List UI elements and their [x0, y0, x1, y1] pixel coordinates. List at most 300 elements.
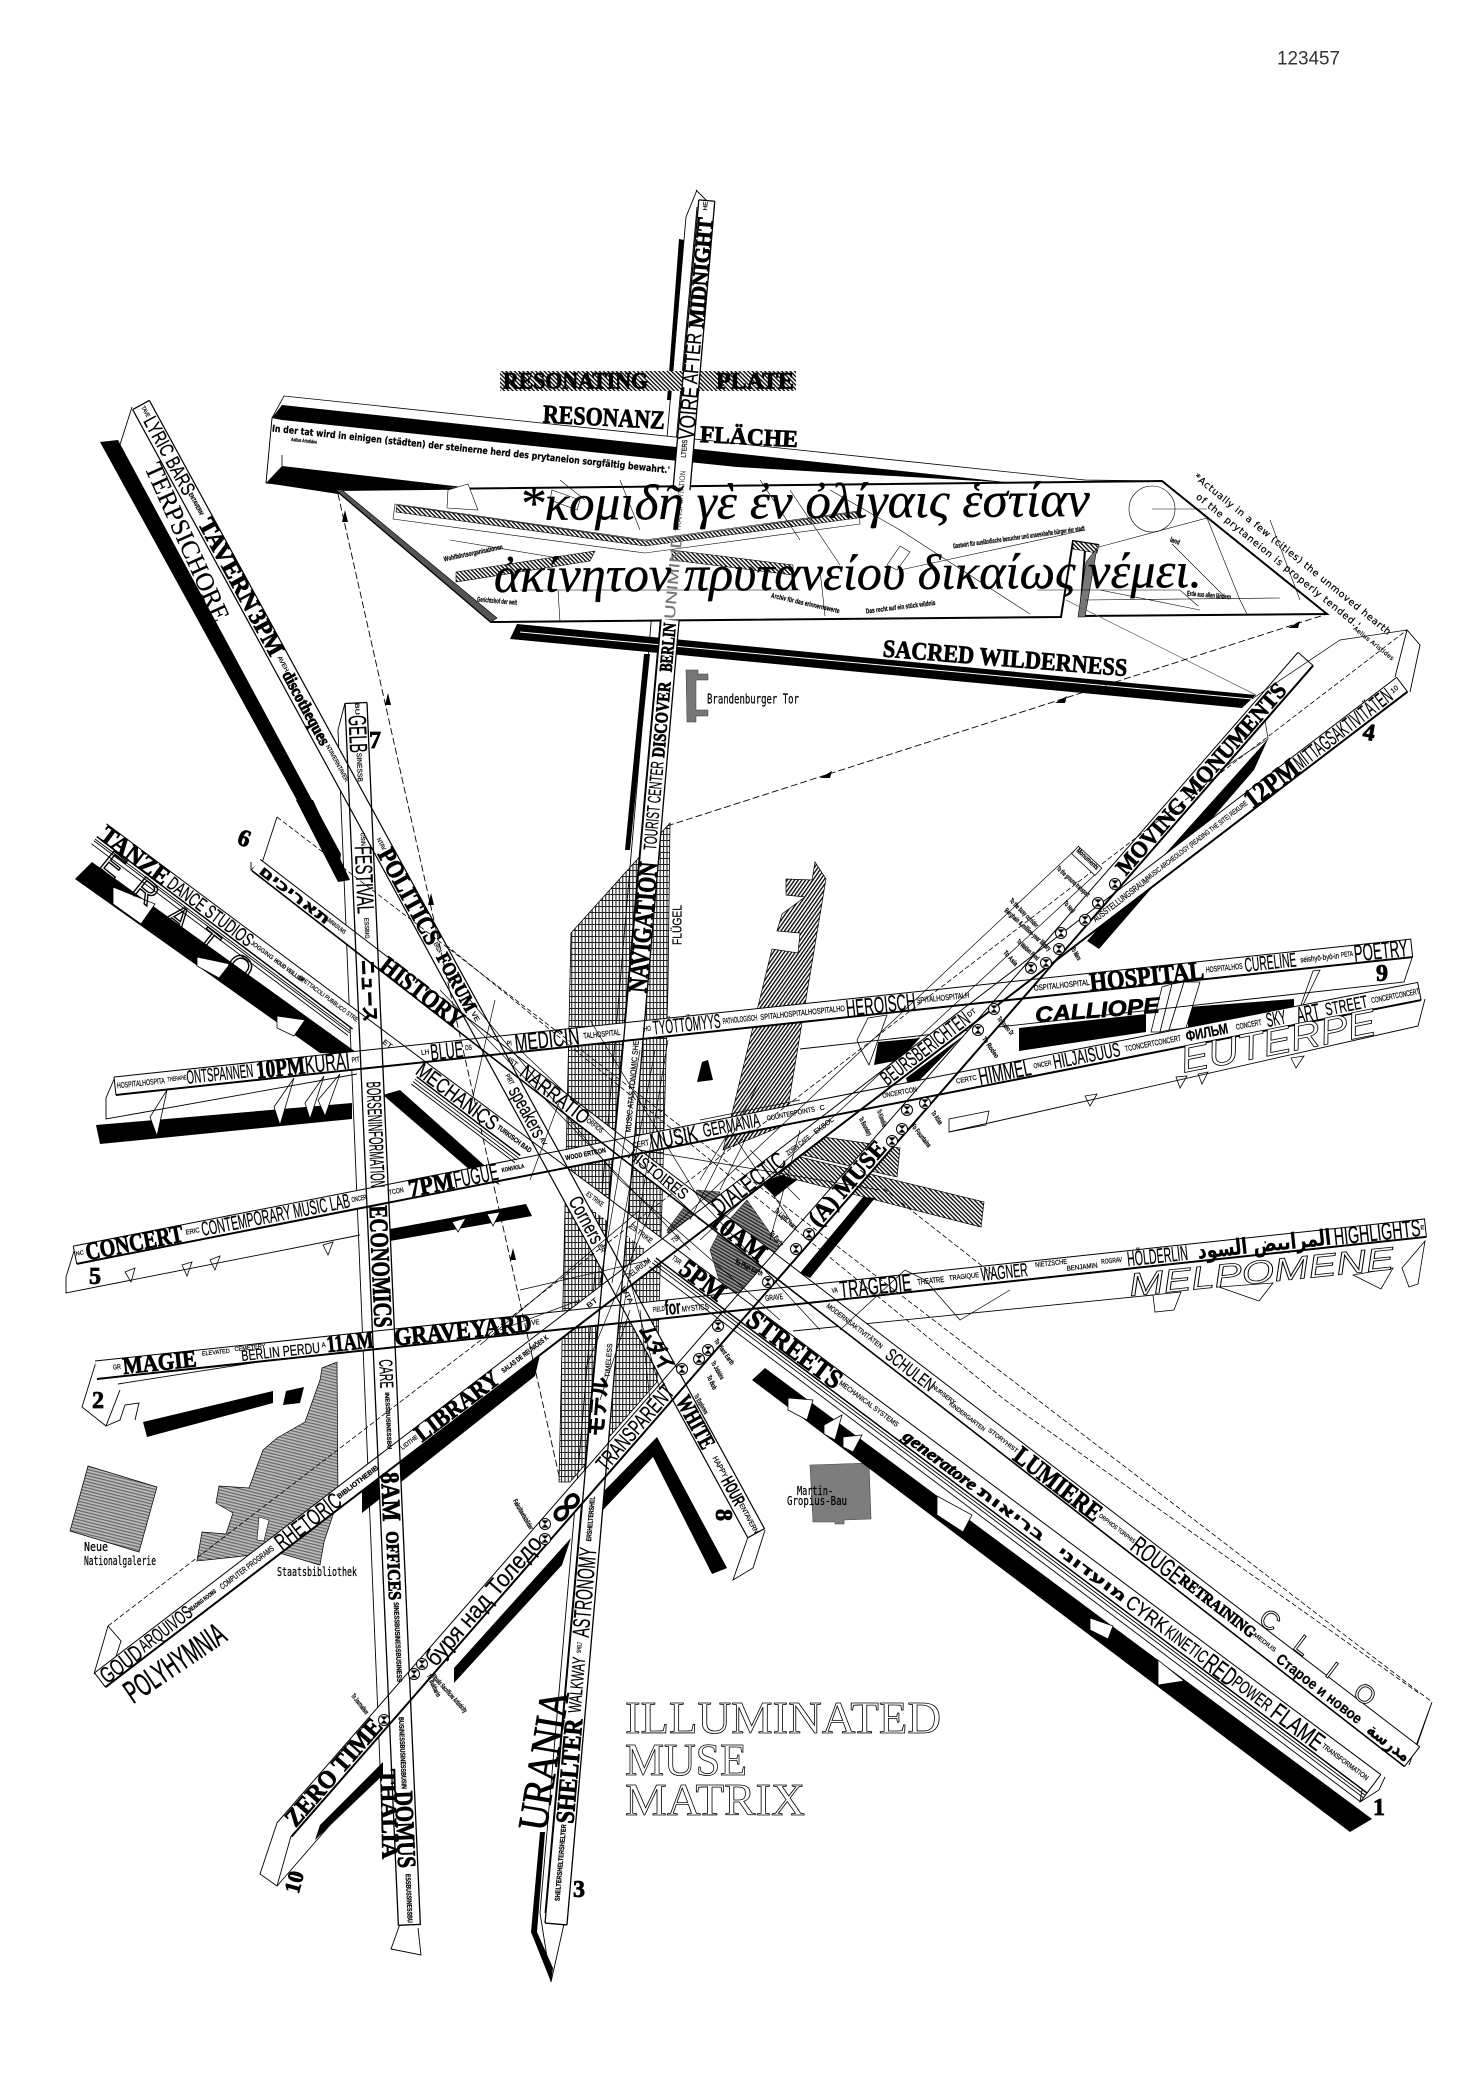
beam 2: Magie to Highlights: GRAVEYARD: [393, 1310, 533, 1352]
beam 2: Magie to Highlights: GRAVE: [765, 1292, 784, 1303]
beam 8: Lyric Bars to Happy Hour: discotheques: [278, 667, 334, 749]
beam numbers 1 to 10: 8: [710, 1509, 736, 1521]
small destination labels beside the stations: To Asia: [1001, 950, 1019, 968]
small destination labels beside the stations: To Bob: [705, 1375, 718, 1391]
beam 8: Lyric Bars to Happy Hour: speakers: [504, 1083, 549, 1142]
small destination labels beside the stations: Monuments: [1075, 847, 1100, 872]
beam numbers 1 to 10: 9: [1376, 961, 1388, 987]
small destination labels beside the stations: To Mars: [1069, 946, 1082, 962]
building: Martin-Gropius-Bau: Gropius-Bau: [787, 1494, 847, 1508]
beam 2: Magie to Highlights: WAGNER: [980, 1260, 1029, 1286]
muse name: Terpsichore: TERPSICHORE: [139, 458, 235, 626]
beam 6: Histories to Clio: [247, 854, 1421, 1769]
beam 2: Magie to Highlights: VE: [531, 1319, 540, 1327]
beam 10: Zero Time to Moving Monuments: MOVING MONUMENTS: [1111, 678, 1291, 880]
beam 5: Concert to Concert: HIMMEL: [976, 1054, 1033, 1091]
beam 2: Magie to Highlights: NIETZSCHE: [1035, 1259, 1068, 1269]
plate: small captions: [443, 525, 1231, 615]
quote: English translation along plate edge: *Actually in a few (cities) the unmoved hearth: [1192, 472, 1393, 638]
beam 5: Concert to Concert: 7PM: [406, 1167, 456, 1203]
muse name: Clio: I: [1320, 1656, 1344, 1684]
beam 6: Histories to Clio: SCHULEN: [882, 1345, 939, 1395]
beam 5: Concert to Concert: CONTEMPORARY MUSIC LAB: [199, 1190, 352, 1241]
beam 6: Histories to Clio: HISTOIRES: [624, 1147, 691, 1203]
muse name: Melpomene: MELPOMENE: [1127, 1240, 1396, 1303]
beam 2: Magie to Highlights: A: [321, 1342, 326, 1349]
beam 4: Polyhymnia to Mittagsaktivitäten: LIDTHE: [400, 1435, 420, 1452]
small destination labels beside the stations: To Fountains: [909, 1123, 932, 1149]
beam 2: Magie to Highlights: ELEVATED: [202, 1349, 231, 1358]
dashed construction lines of the long beams: [108, 630, 1432, 1702]
beam 5: Concert to Concert: ONCER: [351, 1194, 367, 1204]
beam 9: Hospital to Poetry: HO: [644, 1025, 652, 1033]
panel: Greek inscription plate: [336, 480, 1327, 622]
beam 6: Histories to Clio: ORPHIOS TORPHIS: [1097, 1513, 1136, 1545]
resonating plate: hearth box beam: In der tat wird in einigen (städten) der steinerne herd des prytaneion sorgfältig bewahrt.': [271, 424, 670, 476]
beam 7: Gelb to Domus: GELB: [343, 714, 372, 754]
beam 1: Tanze to Streets and Transformation: HOUD VEILLIER: [272, 958, 305, 985]
beam 6: Histories to Clio: HISTORY: [374, 952, 469, 1034]
beam 10: Zero Time to Moving Monuments: (A) MUSE: [803, 1136, 892, 1232]
beam 10: Zero Time to Moving Monuments: буря над Толедо: [420, 1530, 548, 1672]
small destination labels beside the stations: To Explorers: [692, 1393, 709, 1416]
beam 5: Concert to Concert: C: [819, 1104, 825, 1112]
beam 6: Histories to Clio: MEDIUS: [1252, 1632, 1277, 1654]
beam 6: Histories to Clio: LUMIERE: [1008, 1441, 1108, 1527]
beam 5: Concert to Concert: [72, 978, 1422, 1268]
beam 2: Magie to Highlights: BENJAMIN: [1066, 1262, 1098, 1273]
small destination labels beside the stations: To Early: [767, 1230, 784, 1248]
beam 3: Shelter to Voire after Midnight: MUSIC ATAS TONOMIC SHE: [624, 1040, 641, 1133]
beam 2: Magie to Highlights: المرابيض السود: [1196, 1226, 1332, 1265]
beam 2: Magie to Highlights: TRAGIQUE: [949, 1272, 980, 1282]
beam 4: Polyhymnia to Mittagsaktivitäten: 10: [1390, 685, 1400, 695]
beam 10: Zero Time to Moving Monuments: ∞: [537, 1478, 595, 1536]
beam 7: Gelb to Domus: FESTIVAL: [349, 845, 379, 914]
icons: metro station circles along the beams: [378, 878, 1120, 1726]
beam 4: Polyhymnia to Mittagsaktivitäten: RHETORIC: [269, 1487, 346, 1555]
beam 9: Hospital to Poetry: KURAI: [304, 1048, 351, 1079]
beam 4: Polyhymnia to Mittagsaktivitäten: READING ROOMS: [188, 1589, 218, 1614]
small destination labels beside the stations: Berghain & million-year library: [1003, 907, 1052, 953]
quote: English translation along plate edge: of the prytaneion is properly tended.': [1194, 492, 1362, 631]
beam 3: Shelter to Voire after Midnight: SHELTERSHELTERSHELTER: [555, 1824, 568, 1901]
beam 6: Histories to Clio: مدرسة: [1362, 1719, 1415, 1766]
plate: small captions: Gerichtshof der welt: [477, 597, 518, 607]
beam 1: Tanze to Streets and Transformation: MECHANICS: [411, 1059, 503, 1135]
beam 6: Histories to Clio: Старое и новое: [1273, 1651, 1365, 1728]
beam 1: Tanze to Streets and Transformation: TSR: [670, 1255, 682, 1266]
beam 5: Concert to Concert: CONCERT: [83, 1221, 186, 1266]
beam 4: Polyhymnia to Mittagsaktivitäten: COMPUTER PROGRAMS: [218, 1544, 276, 1591]
beam numbers 1 to 10: [89, 719, 1388, 1903]
beam 9: Hospital to Poetry: OS: [465, 1045, 473, 1052]
beam 5: Concert to Concert: NC: [75, 1250, 85, 1258]
beam 3: Shelter to Voire after Midnight: ERSHELTERSHEL: [586, 1496, 597, 1542]
beam 4: Polyhymnia to Mittagsaktivitäten: EKBOL: [813, 1117, 835, 1136]
building: Martin-Gropius-Bau: [787, 1463, 871, 1524]
muse name: Clio: C: [1253, 1602, 1287, 1638]
building: Neue Nationalgalerie: [70, 1466, 157, 1568]
beam 2: Magie to Highlights: [95, 1215, 1427, 1383]
beam 9: Hospital to Poetry: TYÖTTÖMYYS: [652, 1011, 722, 1040]
heading: resonanz fläche: FLÄCHE: [699, 422, 799, 453]
beam 2: Magie to Highlights: for: [664, 1297, 682, 1320]
beam 9: Hospital to Poetry: THERAPIE: [167, 1075, 187, 1083]
building: Staatsbibliothek: [197, 1362, 358, 1579]
beam 10: Zero Time to Moving Monuments: TRANSPARENT: [591, 1379, 679, 1476]
beam 3: Shelter to Voire after Midnight: NAVIGATION: [623, 861, 663, 994]
beam 2: Magie to Highlights: CEMETERY: [234, 1344, 266, 1353]
beam 4: Polyhymnia to Mittagsaktivitäten: MUSIC ARCHEOLOGY (READING THE SITE) REKURE: [1146, 800, 1249, 882]
beam 1: Tanze to Streets and Transformation: TRANSFORMATION: [1320, 1743, 1369, 1782]
muse name: Clio: O: [1348, 1676, 1382, 1712]
muse name: Clio: L: [1288, 1629, 1318, 1661]
beam 1: Tanze to Streets and Transformation: TANZE: [95, 821, 175, 891]
beam 9: Hospital to Poetry: POETRY: [1353, 935, 1409, 968]
beam 7: Gelb to Domus: BU: [353, 703, 360, 715]
beam 1: Tanze to Streets and Transformation: CYRK: [1121, 1592, 1172, 1638]
beam 1: Tanze to Streets and Transformation: RED: [1198, 1648, 1243, 1692]
arrow: dashed line from plate corner to grid block: [338, 494, 560, 1480]
beam 9: Hospital to Poetry: LH: [421, 1049, 430, 1057]
building: hatched stepped block: [723, 862, 826, 1150]
beam 3: Shelter to Voire after Midnight: VOIRE: [673, 386, 703, 441]
beam 1: Tanze to Streets and Transformation: בריאות: [974, 1483, 1049, 1545]
resonating plate: hearth box beam: Aelius Aristides: [291, 437, 317, 446]
beam 6: Histories to Clio: IST: [506, 1057, 519, 1069]
beam 5: Concert to Concert: ONCERTCON: [882, 1086, 918, 1100]
beam 4: Polyhymnia to Mittagsaktivitäten: BT: [586, 1296, 600, 1310]
beam 1: Tanze to Streets and Transformation: ES TRIKE: [584, 1191, 605, 1209]
beam 9: Hospital to Poetry: TALHOSPITAL: [583, 1028, 621, 1041]
beam 5: Concert to Concert: CERT: [632, 1138, 650, 1150]
plate: small captions: Das recht auf ein stück wildnis: [866, 600, 936, 615]
beam 3: Shelter to Voire after Midnight: [542, 199, 721, 1925]
beam 5: Concert to Concert: MUSIK: [648, 1120, 700, 1155]
Greek inscription line 2: ἀκίνητον πρυτανείου δικαίως νέμει.: [494, 542, 1202, 603]
beam 1: Tanze to Streets and Transformation: MECHANICAL SYSTEMS: [838, 1380, 900, 1429]
beam numbers 1 to 10: 10: [279, 1868, 309, 1896]
beam 3: Shelter to Voire after Midnight: LTERS: [681, 439, 689, 458]
arrow: dashed line from grid block to plate tip: [667, 614, 1327, 826]
beam 5: Concert to Concert: COUNTERPOINTS: [766, 1106, 816, 1123]
small destination labels beside the stations: To Rodeo: [980, 1036, 1000, 1060]
beam 1: Tanze to Streets and Transformation: ET: [381, 1039, 394, 1051]
white beam faces (strips mask the buildings): [73, 200, 1426, 1925]
building: Brandenburger Tor: Brandenburger Tor: [707, 692, 799, 708]
plate: small captions: Erde aus allen ländern: [1187, 591, 1231, 601]
beam 8: Lyric Bars to Happy Hour: AV: [538, 1136, 548, 1147]
beam 5: Concert to Concert: ФИЛЬМ: [1184, 1020, 1230, 1045]
beam 3: Shelter to Voire after Midnight: BERLIN: [656, 622, 680, 673]
beam 8: Lyric Bars to Happy Hour: WTA: [619, 1286, 634, 1305]
beam 3: Shelter to Voire after Midnight: UNIMIND: [662, 533, 686, 620]
title: Illuminated Muse Matrix: MUSE: [625, 1734, 747, 1785]
beam 7: Gelb to Domus: USIN: [359, 833, 365, 846]
plate: hatched avenues: [393, 484, 1099, 617]
beam 9: Hospital to Poetry: PETA: [1341, 951, 1354, 959]
beam 3: Shelter to Voire after Midnight: MIDNIGHT: [683, 216, 718, 329]
sacred wilderness black band: [510, 624, 1256, 708]
beam 8: Lyric Bars to Happy Hour: ENTAVERN: [737, 1503, 759, 1535]
beam 9: Hospital to Poetry: PATHOLOGISCH: [722, 1013, 758, 1026]
small destination labels beside the stations: To Walden Pond: [1015, 938, 1040, 962]
beam 6: Histories to Clio: ROUGE: [1125, 1531, 1189, 1590]
beam 8: Lyric Bars to Happy Hour: POLITICS: [372, 844, 446, 950]
beam numbers 1 to 10: 5: [89, 1264, 101, 1290]
beam 5: Concert to Concert: HILJAISUUS: [1051, 1039, 1122, 1074]
label: Flügel: FLÜGEL: [670, 905, 684, 945]
muse name: Euterpe: EUTERPE: [1177, 1002, 1380, 1082]
beam 1: Tanze to Streets and Transformation: ES TRIKE: [628, 1223, 654, 1245]
beam 9: Hospital to Poetry: SPITALHOSPITALHOSPITALHO: [760, 1004, 845, 1022]
small destination labels beside the stations: To Journalism: [349, 1693, 370, 1716]
beam 9: Hospital to Poetry: SPITALHOSPITALH: [916, 991, 970, 1005]
small destination labels beside the stations: To Klondike: [875, 1109, 887, 1128]
pilasters over the shadows: [113, 887, 1425, 1685]
beam 7: Gelb to Domus: INESSBUSINESSBU: [383, 1392, 392, 1449]
beam 5: Concert to Concert: TCON: [388, 1187, 404, 1197]
beam 5: Concert to Concert: KONVIOLA: [501, 1164, 525, 1174]
beam 4: Polyhymnia to Mittagsaktivitäten: LIBRARY: [410, 1366, 505, 1447]
beam 7: Gelb to Domus: SINESSBUSINESSBUSINESS: [392, 1602, 402, 1682]
beam 2: Magie to Highlights: MAGIE: [121, 1346, 198, 1380]
muse name: Erato: ERATO: [94, 844, 261, 989]
beam 8: Lyric Bars to Happy Hour: [129, 399, 768, 1540]
small destination labels beside the stations: To Jobkins: [709, 1360, 725, 1381]
beam 3: Shelter to Voire after Midnight: SHELTER: [550, 1717, 588, 1825]
beam 4: Polyhymnia to Mittagsaktivitäten: SALAS DE REUNIÕES K: [499, 1333, 550, 1375]
beam 9: Hospital to Poetry: [113, 934, 1413, 1100]
beam 1: Tanze to Streets and Transformation: TURKISCH BAD: [495, 1124, 533, 1155]
plate: small captions: Archiv für das erinnernswerte: [770, 593, 840, 615]
beam 3: Shelter to Voire after Midnight: SHELT: [577, 1642, 584, 1653]
beam 2: Magie to Highlights: 11AM: [325, 1327, 375, 1358]
heading: resonating plate: [500, 368, 796, 394]
beam 5: Concert to Concert: FUGUE: [451, 1159, 501, 1194]
beam 4: Polyhymnia to Mittagsaktivitäten: DT: [966, 1007, 978, 1019]
beam 9: Hospital to Poetry: OSPITALHOSPITAL: [1033, 978, 1090, 993]
beam 8: Lyric Bars to Happy Hour: ERIZA: [432, 942, 442, 954]
small destination labels beside the stations: Fakultaetsbilder: [511, 1498, 534, 1531]
thin connecting lines through the centre: [440, 600, 1407, 1400]
muse name: Thalia: THALIA: [376, 1769, 403, 1859]
beam 9: Hospital to Poetry: ONTSPANNEN: [185, 1061, 254, 1089]
plate: small captions: land: [1169, 537, 1181, 547]
beam 7: Gelb to Domus: ESSBUSSINESSBU: [404, 1874, 413, 1923]
small destination labels beside the stations: To the busy corridor: [1008, 898, 1039, 929]
beam 4: Polyhymnia to Mittagsaktivitäten: AUSSTELLUNGSRAUM: [1091, 875, 1151, 924]
beam 8: Lyric Bars to Happy Hour: ムダイ: [634, 1321, 678, 1375]
beam numbers 1 to 10: 6: [234, 825, 254, 853]
building: Neue Nationalgalerie: Nationalgalerie: [84, 1554, 156, 1568]
building: Brandenburger Tor: [686, 670, 799, 722]
beam 7: Gelb to Domus: ECONOMICS: [363, 1205, 398, 1328]
beam 6: Histories to Clio: STORYHIST: [986, 1428, 1019, 1455]
beam 5: Concert to Concert: ERIC: [185, 1227, 200, 1237]
beam 10: Zero Time to Moving Monuments: ZERO TIME: [280, 1713, 388, 1832]
building: Neue Nationalgalerie: Neue: [84, 1540, 108, 1554]
title: Illuminated Muse Matrix: ILLUMINATED: [625, 1692, 941, 1743]
beam 9: Hospital to Poetry: HOSPITALHOSPITA: [117, 1076, 166, 1090]
small destination labels beside the stations: [349, 846, 1102, 1716]
building: Flügel grid block: [559, 823, 670, 1482]
beam 7: Gelb to Domus: [342, 702, 424, 1925]
beam 8: Lyric Bars to Happy Hour: HOUR: [717, 1473, 749, 1509]
beam 6: Histories to Clio: NURSERY: [930, 1384, 956, 1406]
beam numbers 1 to 10: 1: [1373, 1795, 1385, 1821]
muse name: Clio: [1253, 1602, 1382, 1712]
beam 6: Histories to Clio: MODERNSAKTIVITÄTEN: [825, 1302, 884, 1350]
small destination labels beside the stations: To the ground transport: [1055, 865, 1091, 899]
beam 8: Lyric Bars to Happy Hour: ER: [596, 1244, 606, 1254]
small destination labels beside the stations: To Rodeo Dr: [995, 1016, 1015, 1037]
beam 8: Lyric Bars to Happy Hour: TAVERN: [192, 514, 264, 616]
beam 6: Histories to Clio: תאריכים: [255, 862, 334, 928]
beam 8: Lyric Bars to Happy Hour: WHITE: [671, 1391, 720, 1453]
beam 6: Histories to Clio: KINDERGARTEN: [947, 1401, 986, 1433]
beam 9: Hospital to Poetry: MEDICIN: [513, 1023, 581, 1057]
beam 2: Magie to Highlights: TRAGEDIE: [838, 1269, 913, 1304]
beam 3: Shelter to Voire after Midnight: TOURIST CENTER: [640, 761, 668, 851]
beam 8: Lyric Bars to Happy Hour: PIRT: [503, 1073, 515, 1087]
beam 2: Magie to Highlights: BERLIN PERDU: [240, 1340, 321, 1365]
beam 9: Hospital to Poetry: HOSPITAL: [1088, 956, 1205, 997]
beam 1: Tanze to Streets and Transformation: STREETS: [741, 1304, 849, 1395]
beam 2: Magie to Highlights: GR: [113, 1364, 121, 1372]
Greek inscription line 1: *κομιδῆ γὲ ἐν ὀλίγαις ἑστίαν: [519, 471, 1091, 531]
beam 5: Concert to Concert: STREET: [1323, 992, 1369, 1020]
beam 6: Histories to Clio: RETRAINING: [1175, 1572, 1259, 1642]
beam 9: Hospital to Poetry: HOSPITALHOS: [1205, 962, 1243, 974]
plate: small captions: Wohlfahrtsorganisationen: [443, 544, 503, 563]
beam 8: Lyric Bars to Happy Hour: Corners: [564, 1193, 607, 1248]
beam 3: Shelter to Voire after Midnight: モテル: [586, 1376, 613, 1438]
beam 7: Gelb to Domus: ESSBIG: [362, 918, 369, 939]
heading: resonating plate: PLATE: [716, 368, 794, 394]
beam 4: Polyhymnia to Mittagsaktivitäten: TSR: [671, 1234, 682, 1245]
building: Staatsbibliothek: Staatsbibliothek: [277, 1565, 358, 1579]
small destination labels beside the stations: To Atlas: [929, 1110, 944, 1126]
beam 4: Polyhymnia to Mittagsaktivitäten: BEURSBERICHTEN: [876, 1008, 974, 1090]
small destination labels beside the stations: To Light Years: [773, 1207, 798, 1231]
muse name: Urania: URANIA: [510, 1687, 579, 1834]
beam 1: Tanze to Streets and Transformation: generatore: [898, 1426, 982, 1495]
plate: site plan lines: [450, 480, 1300, 622]
beam 9: Hospital to Poetry: PI: [506, 1040, 512, 1048]
quote: English translation along plate edge: Aelius Aristides: [1352, 625, 1395, 662]
beam 4: Polyhymnia to Mittagsaktivitäten: ARQUIVOS: [135, 1602, 197, 1657]
beam 2: Magie to Highlights: FIELD: [652, 1306, 665, 1314]
beam 2: Magie to Highlights: VA: [831, 1287, 838, 1295]
beam 7: Gelb to Domus: CARE: [374, 1359, 396, 1389]
beam 9: Hospital to Poetry: BLUE: [429, 1036, 464, 1065]
beam 2: Magie to Highlights: E: [1420, 1225, 1425, 1231]
beam 5: Concert to Concert: GERMANIA: [701, 1110, 762, 1142]
black ground shadows of the beams: [75, 239, 1372, 1982]
small destination labels beside the stations: To Bukharin: [425, 1674, 441, 1698]
muse name: Calliope: CALLIOPE: [1034, 992, 1162, 1027]
beam numbers 1 to 10: 2: [92, 1388, 104, 1414]
beam 5: Concert to Concert: CERTC: [956, 1075, 977, 1086]
beam 8: Lyric Bars to Happy Hour: TAVE: [139, 405, 150, 419]
beam 1: Tanze to Streets and Transformation: JOGGING: [249, 941, 274, 962]
beam 3: Shelter to Voire after Midnight: TIMELESS: [604, 1343, 614, 1378]
heading: resonanz fläche: [542, 400, 799, 453]
beam numbers 1 to 10: 7: [369, 728, 381, 754]
beam 6: Histories to Clio: NARRATIO: [515, 1062, 594, 1129]
beam 3: Shelter to Voire after Midnight: HE: [703, 201, 710, 211]
beam 4: Polyhymnia to Mittagsaktivitäten: ZORN CAFE: [785, 1134, 813, 1157]
beam 4: Polyhymnia to Mittagsaktivitäten: BIBLIOTHEBIB: [336, 1465, 380, 1501]
heading: resonanz fläche: RESONANZ: [542, 400, 666, 435]
beam 3: Shelter to Voire after Midnight: TRANSPORTATION: [673, 470, 688, 532]
beam 1: Tanze to Streets and Transformation: POWER: [1228, 1672, 1276, 1715]
beam 8: Lyric Bars to Happy Hour: FORUM: [431, 950, 481, 1016]
beam 1: Tanze to Streets and Transformation: מועדוני: [1054, 1542, 1131, 1606]
beam 5: Concert to Concert: ONCER: [1033, 1060, 1052, 1070]
beam 7: Gelb to Domus: 8AM: [375, 1472, 406, 1522]
beam numbers 1 to 10: 4: [1361, 719, 1377, 747]
beam 9: Hospital to Poetry: HEROISCH: [845, 988, 917, 1021]
beam 9: Hospital to Poetry: CURELINE: [1243, 949, 1298, 977]
beam 4: Polyhymnia to Mittagsaktivitäten: [91, 672, 1411, 1692]
beam 8: Lyric Bars to Happy Hour: ENTAVERN': [187, 492, 204, 517]
small destination labels beside the stations: To Plan Earth: [734, 1259, 764, 1278]
sheet number: 123457: [1277, 48, 1340, 70]
beam 8: Lyric Bars to Happy Hour: LYRIC BARS: [139, 413, 199, 499]
beam 1: Tanze to Streets and Transformation: SPETTACOLI PUBBLICO STRE: [297, 975, 359, 1024]
beam 10: Zero Time to Moving Monuments: [269, 646, 1321, 1843]
beam 2: Magie to Highlights: THEATRE: [917, 1275, 945, 1287]
beam 6: Histories to Clio: ORFIOS: [585, 1118, 604, 1135]
beam 8: Lyric Bars to Happy Hour: NTAVERNTAVER: [324, 744, 349, 784]
beam 1: Tanze to Streets and Transformation: [87, 819, 1384, 1802]
heading: resonating plate: RESONATING: [503, 368, 648, 394]
beam 4: Polyhymnia to Mittagsaktivitäten: 12PM: [1238, 753, 1306, 815]
title: Illuminated Muse Matrix: MATRIX: [625, 1774, 805, 1825]
resonating plate: hearth box beam: [266, 396, 1162, 494]
beam 9: Hospital to Poetry: PIT: [351, 1056, 361, 1064]
beam 1: Tanze to Streets and Transformation: FLAME: [1265, 1698, 1330, 1756]
small destination labels beside the stations: To Plant Earth: [712, 1338, 735, 1367]
beam 4: Polyhymnia to Mittagsaktivitäten: GOUD: [94, 1639, 148, 1689]
beam 7: Gelb to Domus: SINESSB: [355, 753, 363, 782]
beam 8: Lyric Bars to Happy Hour: VE: [469, 1011, 480, 1023]
beam 5: Concert to Concert: TCONCERTCONCERT: [1124, 1034, 1182, 1053]
building: Martin-Gropius-Bau: Martin-: [797, 1484, 833, 1498]
beam 9: Hospital to Poetry: seishyō-byō-in: [1300, 951, 1340, 964]
beam 1: Tanze to Streets and Transformation: DANCE STUDIOS: [163, 873, 257, 951]
beam 8: Lyric Bars to Happy Hour: AVEH: [276, 656, 289, 673]
small destination labels beside the stations: To Boundary: [857, 1116, 873, 1137]
beam 9: Hospital to Poetry: 10PM: [255, 1052, 306, 1084]
small destination labels beside the stations: To Hell: [1061, 900, 1076, 915]
beam 4: Polyhymnia to Mittagsaktivitäten: DELIRIUM: [624, 1256, 653, 1281]
beam 8: Lyric Bars to Happy Hour: 3PM: [243, 606, 288, 661]
beam 2: Magie to Highlights: MYSTICS: [681, 1302, 709, 1314]
beam 1: Tanze to Streets and Transformation: KINETIC: [1161, 1622, 1212, 1667]
beam 2: Magie to Highlights: HÖLDERLIN: [1126, 1242, 1189, 1271]
beam 5: Concert to Concert: WOOD ERTCON: [565, 1147, 607, 1162]
plate: small captions: Gastwirt für ausländische besucher und unsesshafte bürger der stadt: [953, 525, 1086, 550]
beam 4: Polyhymnia to Mittagsaktivitäten: DIALECTIC: [707, 1147, 791, 1221]
beam 7: Gelb to Domus: BUSINESSBUSINESSBUSIN: [397, 1717, 407, 1789]
muse name: Polyhymnia: POLYHYMNIA: [117, 1616, 233, 1710]
beam 3: Shelter to Voire after Midnight: DISCOVER: [648, 680, 675, 758]
beam 8: Lyric Bars to Happy Hour: HAPPY: [711, 1455, 730, 1480]
